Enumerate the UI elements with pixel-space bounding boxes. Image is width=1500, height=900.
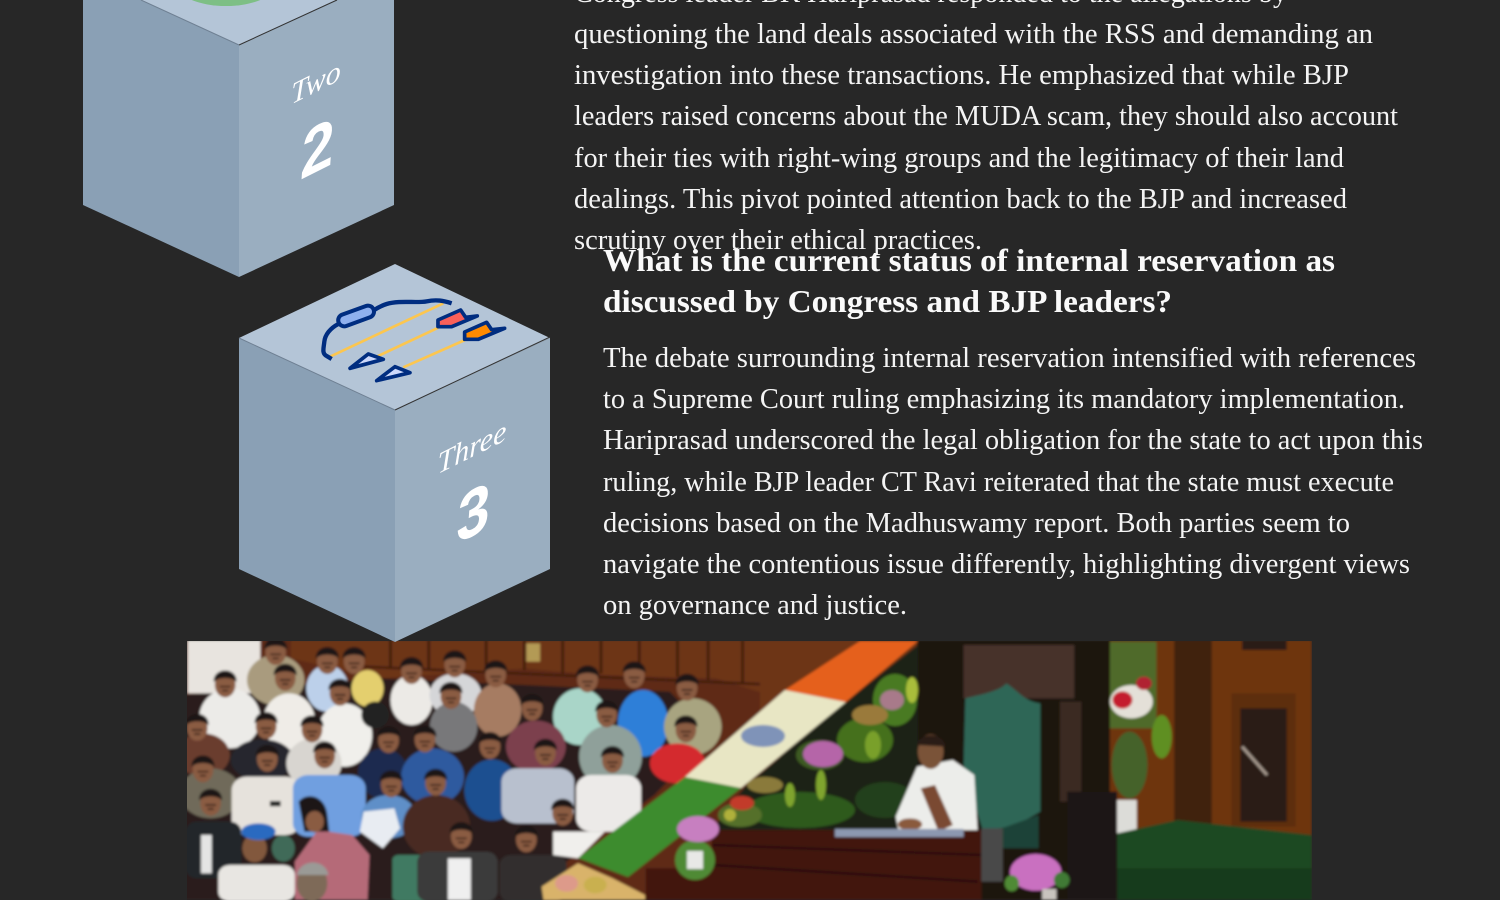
photo: legislative assembly chamber — [176, 638, 1312, 900]
text block: Hariprasad response: leaders raised concerns about the MUDA scam, they should also account — [574, 101, 1398, 132]
text block: Hariprasad response: scrutiny over their ethical practices. — [574, 225, 982, 256]
cube three numeral: 3 — [454, 467, 493, 559]
text block: internal reservation debate: Hariprasad underscored the legal obligation for the state to act upon this — [603, 425, 1423, 456]
text block: Hariprasad response: dealings. This pivot pointed attention back to the BJP and increased — [574, 184, 1347, 215]
speaker figure — [896, 760, 978, 835]
green flower band — [578, 777, 741, 877]
cube two — [83, 0, 394, 277]
text block: Hariprasad response: investigation into these transactions. He emphasized that while BJP — [574, 60, 1349, 91]
text block: internal reservation debate: ruling, while BJP leader CT Ravi reiterated that the state must execute — [603, 467, 1394, 498]
white flower band — [685, 690, 846, 788]
text block: internal reservation debate: navigate the contentious issue differently, highlighting divergent views — [603, 549, 1410, 580]
cube two word label: Two — [291, 53, 341, 111]
pink flower pot — [1010, 854, 1061, 891]
flower tricolour and planting — [578, 641, 918, 877]
green speaker chair — [964, 683, 1040, 832]
text block: internal reservation debate: to a Supreme Court ruling emphasizing its mandatory implementation. — [603, 384, 1405, 415]
cube two numeral: 2 — [298, 103, 337, 195]
text block: internal reservation debate: The debate surrounding internal reservation intensified with references — [603, 343, 1416, 374]
heading: internal reservation question: discussed by Congress and BJP leaders? — [603, 283, 1172, 319]
cube three — [239, 264, 550, 642]
photo right: chair, carved wall and wood panels — [760, 640, 1312, 900]
heading: internal reservation question — [603, 242, 1335, 319]
cube three left face — [239, 338, 395, 642]
icon: bow and arrows — [323, 300, 505, 381]
text block: internal reservation debate — [603, 343, 1423, 621]
flower colour clusters — [718, 674, 918, 828]
photo left: seated members — [176, 638, 780, 900]
cube three right face — [395, 338, 550, 642]
text block: Hariprasad response — [574, 0, 1398, 256]
speaker desk — [646, 830, 981, 900]
text block: internal reservation debate: on governance and justice. — [603, 590, 907, 621]
green floor — [1115, 819, 1312, 871]
dark flower bank — [712, 645, 918, 835]
cube two top face — [83, 0, 394, 45]
orange flower band — [785, 641, 918, 702]
cube two right face — [239, 0, 394, 277]
heading: internal reservation question: What is the current status of internal reservation as — [603, 242, 1335, 278]
text block: Hariprasad response: for their ties with right-wing groups and the legitimacy of their land — [574, 143, 1344, 174]
small flower vase on lower desk — [675, 816, 719, 880]
cube three top face — [239, 264, 550, 410]
cube three word label: Three — [438, 413, 506, 481]
text block: Hariprasad response: questioning the land deals associated with the RSS and demanding an — [574, 19, 1373, 50]
cube two green icon remnant — [176, 0, 276, 6]
cube two left face — [83, 0, 239, 277]
speaker and desk — [646, 734, 1070, 900]
text block: internal reservation debate: decisions based on the Madhuswamy report. Both parties seem to — [603, 508, 1350, 539]
